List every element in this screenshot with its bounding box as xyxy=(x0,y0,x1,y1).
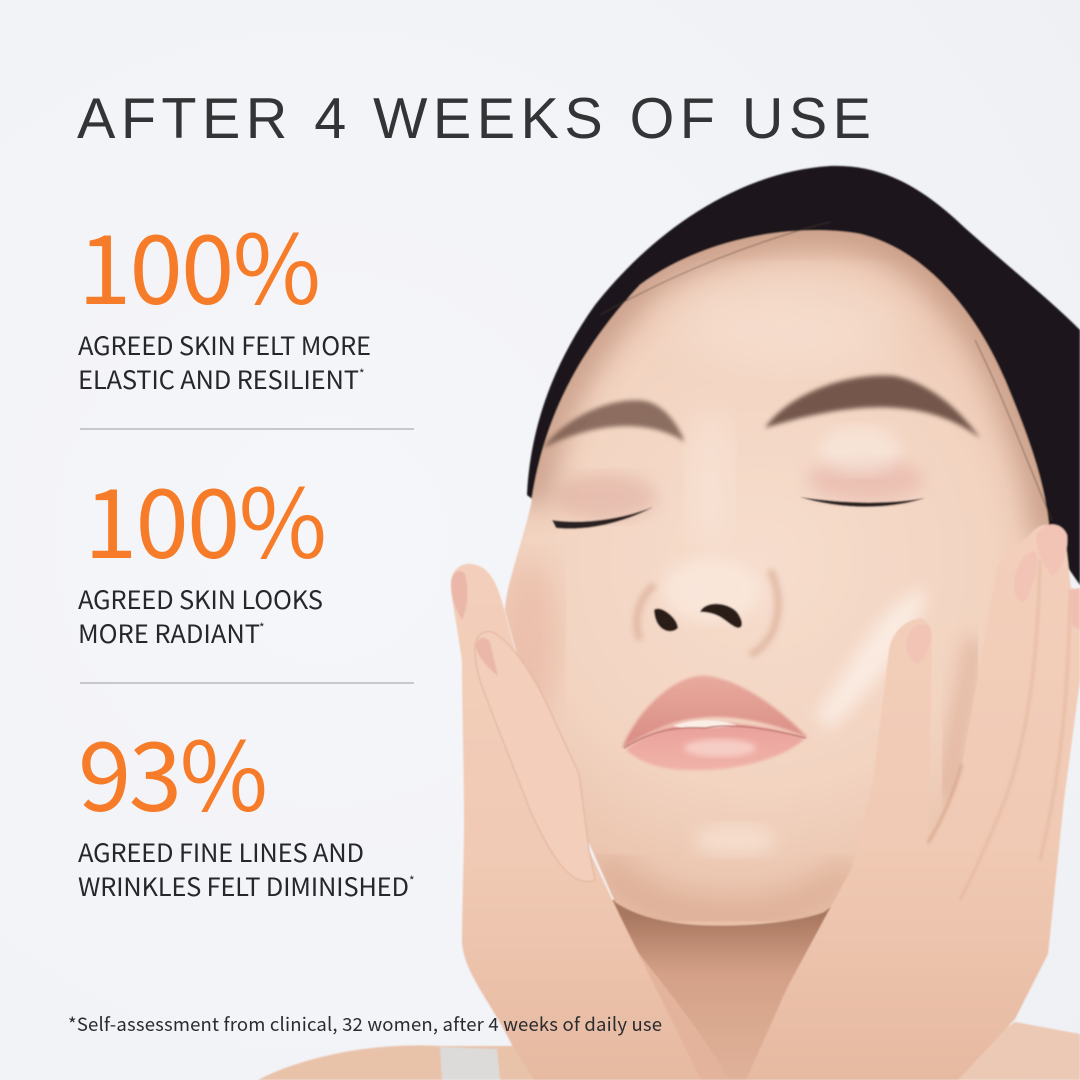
stat 2 description: AGREED SKIN LOOKS xyxy=(78,580,323,617)
eyelid highlight xyxy=(820,426,900,474)
shoulder left xyxy=(258,1045,560,1080)
left hand xyxy=(451,564,701,1080)
nostrils xyxy=(654,604,742,631)
stat 3 description xyxy=(78,833,415,904)
stat 1 description xyxy=(78,326,371,397)
finger lines xyxy=(960,560,1070,900)
right eyebrow xyxy=(765,375,980,438)
eye shadows xyxy=(553,473,657,521)
left eyebrow xyxy=(543,400,685,448)
stat 3 description: WRINKLES FELT DIMINISHED xyxy=(78,867,409,904)
footnote: *Self-assessment from clinical, 32 women, after 4 weeks of daily use xyxy=(68,1011,662,1037)
divider 1 xyxy=(80,428,414,430)
divider 2 xyxy=(80,682,414,684)
title: AFTER 4 WEEKS OF USE xyxy=(77,87,871,151)
stat 3 description: AGREED FINE LINES AND xyxy=(78,833,364,870)
lower finger behind xyxy=(632,945,730,1080)
stat 1 description: AGREED SKIN FELT MORE xyxy=(78,326,371,363)
face shading xyxy=(500,230,1050,916)
hair strands xyxy=(600,222,1052,520)
stat 3 number: 93% xyxy=(78,700,268,839)
right fingernails xyxy=(906,524,1067,664)
stat 2 xyxy=(78,447,327,651)
stat 1 number: 100% xyxy=(78,193,321,332)
right hand xyxy=(746,524,1080,1080)
right eye lash xyxy=(800,497,925,507)
stat 2 description: * xyxy=(259,619,265,636)
cheek highlight xyxy=(815,588,926,730)
gap shadow xyxy=(928,764,962,843)
second finger xyxy=(475,632,595,882)
left eye lash xyxy=(552,507,653,529)
chin highlight xyxy=(693,824,777,856)
back of hand and fingers xyxy=(746,525,1080,1080)
stat 2 number: 100% xyxy=(84,447,327,586)
stat 1 description: ELASTIC AND RESILIENT xyxy=(78,360,359,397)
lips xyxy=(622,676,808,770)
stat 1 xyxy=(78,193,371,397)
stat 3 description: * xyxy=(409,872,415,889)
stat 2 description: MORE RADIANT xyxy=(78,614,260,651)
neck xyxy=(600,900,840,1080)
stat 3 xyxy=(78,700,415,904)
stat 2 description xyxy=(78,580,323,651)
palm and first finger xyxy=(451,564,701,1080)
nose xyxy=(637,410,778,655)
shoulder right xyxy=(930,1022,1080,1080)
photo: woman with hands on face xyxy=(258,166,1080,1080)
stat 1 description: * xyxy=(359,365,365,382)
left fingernails xyxy=(451,571,498,676)
face xyxy=(505,230,1050,926)
top strap xyxy=(440,1047,500,1080)
hair xyxy=(527,166,1080,600)
